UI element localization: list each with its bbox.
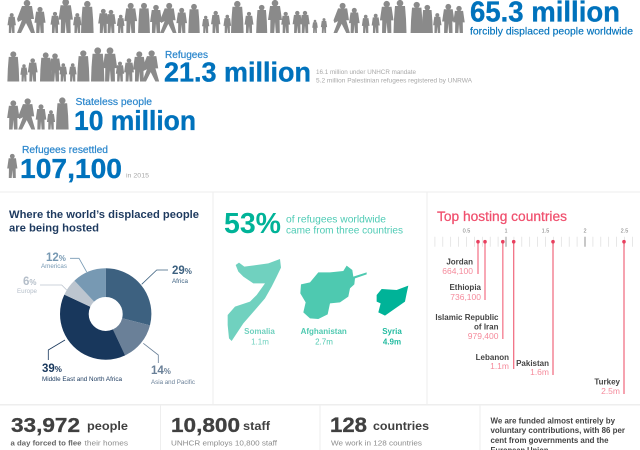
label: Syria: 4.9m xyxy=(383,338,401,346)
label: Somalia xyxy=(244,327,275,346)
leader lines xyxy=(40,258,168,363)
stat: 128 countries: 128 xyxy=(330,413,367,437)
stat: 33,972 people xyxy=(10,414,128,448)
axis scale: 2.5 xyxy=(621,229,628,235)
axis scale: 2 xyxy=(583,229,587,235)
text block: funding: voluntary contributions, with 86 per xyxy=(490,425,626,435)
stat: 10,800 staff: staff xyxy=(243,419,271,433)
stat: 33,972 people: their homes xyxy=(84,439,128,448)
label: Syria xyxy=(382,327,402,346)
stat: 128 countries: countries xyxy=(373,419,429,433)
label: Europe: Europe xyxy=(17,289,38,295)
headline: 53% xyxy=(224,208,403,240)
heading: top hosting: Top hosting countries xyxy=(437,209,567,224)
label: Somalia: 1.1m xyxy=(251,338,269,346)
heading: where hosted: are being hosted xyxy=(9,222,99,234)
label: Afghanistan: Afghanistan xyxy=(301,327,347,336)
text block: funding: cent from governments and the xyxy=(490,435,609,445)
label: Somalia: Somalia xyxy=(244,327,275,336)
marker: Lebanon: 1.1m xyxy=(490,361,509,371)
label: Americas: Americas xyxy=(41,264,67,270)
marker: Lebanon: Lebanon xyxy=(476,353,509,362)
stat: 10,800 staff xyxy=(171,414,278,448)
label: Americas xyxy=(41,252,67,270)
marker: Islamic Republic of Iran: Islamic Republic xyxy=(435,313,499,322)
marker: Jordan xyxy=(442,240,480,276)
text block: funding xyxy=(490,415,626,450)
marker: Ethiopia xyxy=(449,240,487,302)
icon: resettled person xyxy=(7,154,17,178)
marker: Islamic Republic of Iran: of Iran xyxy=(474,322,499,332)
stat: refugees resettled 107,100 xyxy=(20,145,150,184)
axis scale: 0.5 xyxy=(463,229,470,235)
heading: where hosted xyxy=(9,209,199,234)
panel: 53 percent xyxy=(224,208,408,346)
stat: 10,800 staff: 10,800 xyxy=(171,414,240,437)
panel: where hosted xyxy=(9,209,199,386)
donut chart xyxy=(74,283,137,345)
map: Afghanistan xyxy=(300,266,367,319)
stat: refugees 21.3 million xyxy=(164,50,472,88)
stat: 10,800 staff: UNHCR employs 10,800 staff xyxy=(171,439,278,448)
stat: 128 countries: We work in 128 countries xyxy=(331,439,422,448)
stat: 33,972 people: a day forced to flee xyxy=(10,439,82,448)
marker: Islamic Republic of Iran: 979,400 xyxy=(468,331,499,341)
marker: Jordan: Jordan xyxy=(446,257,473,266)
stat: refugees resettled 107,100: in 2015 xyxy=(126,174,150,180)
marker: Turkey xyxy=(594,240,626,396)
marker: Turkey: Turkey xyxy=(594,378,621,386)
row: forcibly displaced people silhouettes xyxy=(7,0,465,33)
row: stateless silhouettes xyxy=(7,97,69,130)
marker: Pakistan: 1.6m xyxy=(530,367,549,377)
stat: 33,972 people: people xyxy=(87,419,128,433)
stat: 65.3 million: forcibly displaced people worldwide xyxy=(470,26,633,38)
label: Middle East and North Africa: 39% xyxy=(42,363,62,375)
stat: refugees 21.3 million: 16.1 million under UNHCR mandate xyxy=(316,70,417,76)
stat: refugees resettled 107,100: Refugees resettled xyxy=(22,145,108,156)
panel: top hosting countries xyxy=(435,209,632,396)
label: Asia and Pacific xyxy=(151,365,195,386)
stat: 128 countries xyxy=(330,413,429,448)
label: Asia and Pacific: 14% xyxy=(151,365,171,377)
label: Europe xyxy=(17,276,38,295)
marker: Pakistan xyxy=(516,240,555,377)
label: Afghanistan xyxy=(301,327,347,346)
label: Americas: 12% xyxy=(46,252,66,264)
label: Middle East and North Africa: Middle East and North Africa xyxy=(42,377,123,383)
map: Somalia xyxy=(228,259,281,341)
label: Africa: Africa xyxy=(172,279,189,285)
stat: refugees resettled 107,100: 107,100 xyxy=(20,153,122,184)
label: Europe: 6% xyxy=(23,276,37,288)
marker: Turkey: 2.5m xyxy=(601,386,620,396)
marker: Islamic Republic of Iran xyxy=(435,240,505,341)
stat: 33,972 people: 33,972 xyxy=(11,414,80,437)
dividers xyxy=(0,192,640,450)
marker: Ethiopia: 736,100 xyxy=(450,292,481,302)
stat: stateless 10 million: 10 million xyxy=(74,105,196,136)
stat: refugees 21.3 million: 21.3 million xyxy=(164,56,311,88)
marker: Ethiopia: Ethiopia xyxy=(449,283,482,292)
axis scale: 1 xyxy=(504,229,508,235)
label: Asia and Pacific: Asia and Pacific xyxy=(151,380,195,386)
row: refugees silhouettes xyxy=(7,47,159,82)
text block: funding: We are funded almost entirely by xyxy=(490,415,615,425)
label: Africa xyxy=(172,265,192,285)
label: Africa: 29% xyxy=(172,265,192,277)
axis scale xyxy=(435,229,632,247)
label: Middle East and North Africa xyxy=(42,363,123,383)
headline: 53%: 53% xyxy=(224,208,281,240)
label: Syria: Syria xyxy=(382,327,402,336)
headline: 53%: came from three countries xyxy=(286,226,403,236)
label: Afghanistan: 2.7m xyxy=(315,338,333,346)
stat: refugees 21.3 million: Refugees xyxy=(165,50,208,61)
stat: stateless 10 million: Stateless people xyxy=(76,97,152,108)
map: Syria xyxy=(377,286,408,316)
heading: where hosted: Where the world’s displaced people xyxy=(9,209,199,221)
headline: 53%: of refugees worldwide xyxy=(286,215,386,226)
marker: Pakistan: Pakistan xyxy=(516,359,549,368)
axis scale: 1.5 xyxy=(542,229,549,235)
marker: Lebanon xyxy=(476,240,516,371)
marker: Jordan: 664,100 xyxy=(442,266,473,276)
stat: refugees 21.3 million: 5.2 million Palestinian refugees registered by UNRWA xyxy=(316,78,472,84)
